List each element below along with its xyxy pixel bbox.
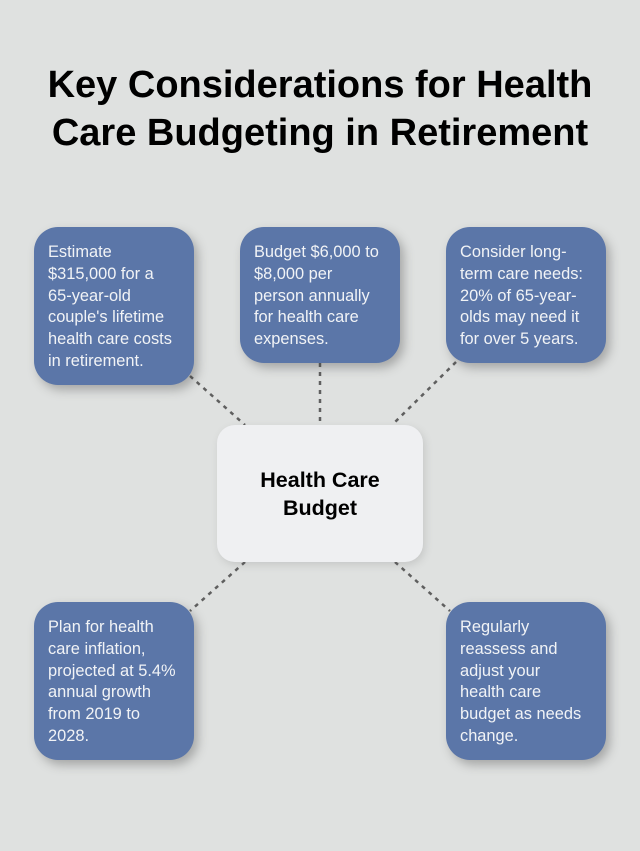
panel: reassess budget: adjust your: [460, 662, 540, 680]
title: Care Budgeting in Retirement: [52, 112, 588, 154]
panel: health care inflation: Plan for health: [48, 618, 154, 636]
panel: lifetime cost estimate: health care costs: [48, 330, 172, 348]
panel: lifetime cost estimate: Estimate: [48, 243, 112, 261]
panel: reassess budget: [446, 602, 606, 760]
panel: long-term care: olds may need it: [460, 308, 579, 326]
panel: health care inflation: 2028.: [48, 727, 89, 745]
panel: reassess budget: Regularly: [460, 618, 529, 636]
panel: long-term care: 20% of 65-year-: [460, 287, 577, 305]
panel: health care inflation: annual growth: [48, 683, 151, 701]
panel: long-term care: Consider long-: [460, 243, 567, 261]
panel: health care inflation: from 2019 to: [48, 705, 140, 723]
panel: reassess budget: change.: [460, 727, 518, 745]
panel: reassess budget: budget as needs: [460, 705, 581, 723]
panel: long-term care: [446, 227, 606, 363]
panel: lifetime cost estimate: in retirement.: [48, 352, 144, 370]
panel: health care inflation: [34, 602, 194, 760]
panel: annual budget: person annually: [254, 287, 370, 305]
panel: central topic: Health Care: [260, 468, 380, 492]
panel: annual budget: expenses.: [254, 330, 329, 348]
panel: lifetime cost estimate: $315,000 for a: [48, 265, 154, 283]
panel: health care inflation: care inflation,: [48, 640, 146, 658]
panel: lifetime cost estimate: 65-year-old: [48, 287, 131, 305]
title: Key Considerations for Health: [48, 64, 592, 106]
panel: lifetime cost estimate: couple's lifetime: [48, 308, 164, 326]
panel: reassess budget: health care: [460, 683, 541, 701]
panel: central topic: [217, 425, 423, 562]
panel: long-term care: term care needs:: [460, 265, 583, 283]
title: [48, 64, 592, 154]
panel: annual budget: [240, 227, 400, 363]
panel: reassess budget: reassess and: [460, 640, 558, 658]
panel: lifetime cost estimate: [34, 227, 194, 385]
panel: annual budget: $8,000 per: [254, 265, 332, 283]
panel: long-term care: for over 5 years.: [460, 330, 578, 348]
panel: annual budget: for health care: [254, 308, 359, 326]
panel: central topic: Budget: [283, 496, 357, 520]
panel: annual budget: Budget $6,000 to: [254, 243, 379, 261]
panel: health care inflation: projected at 5.4%: [48, 662, 176, 680]
